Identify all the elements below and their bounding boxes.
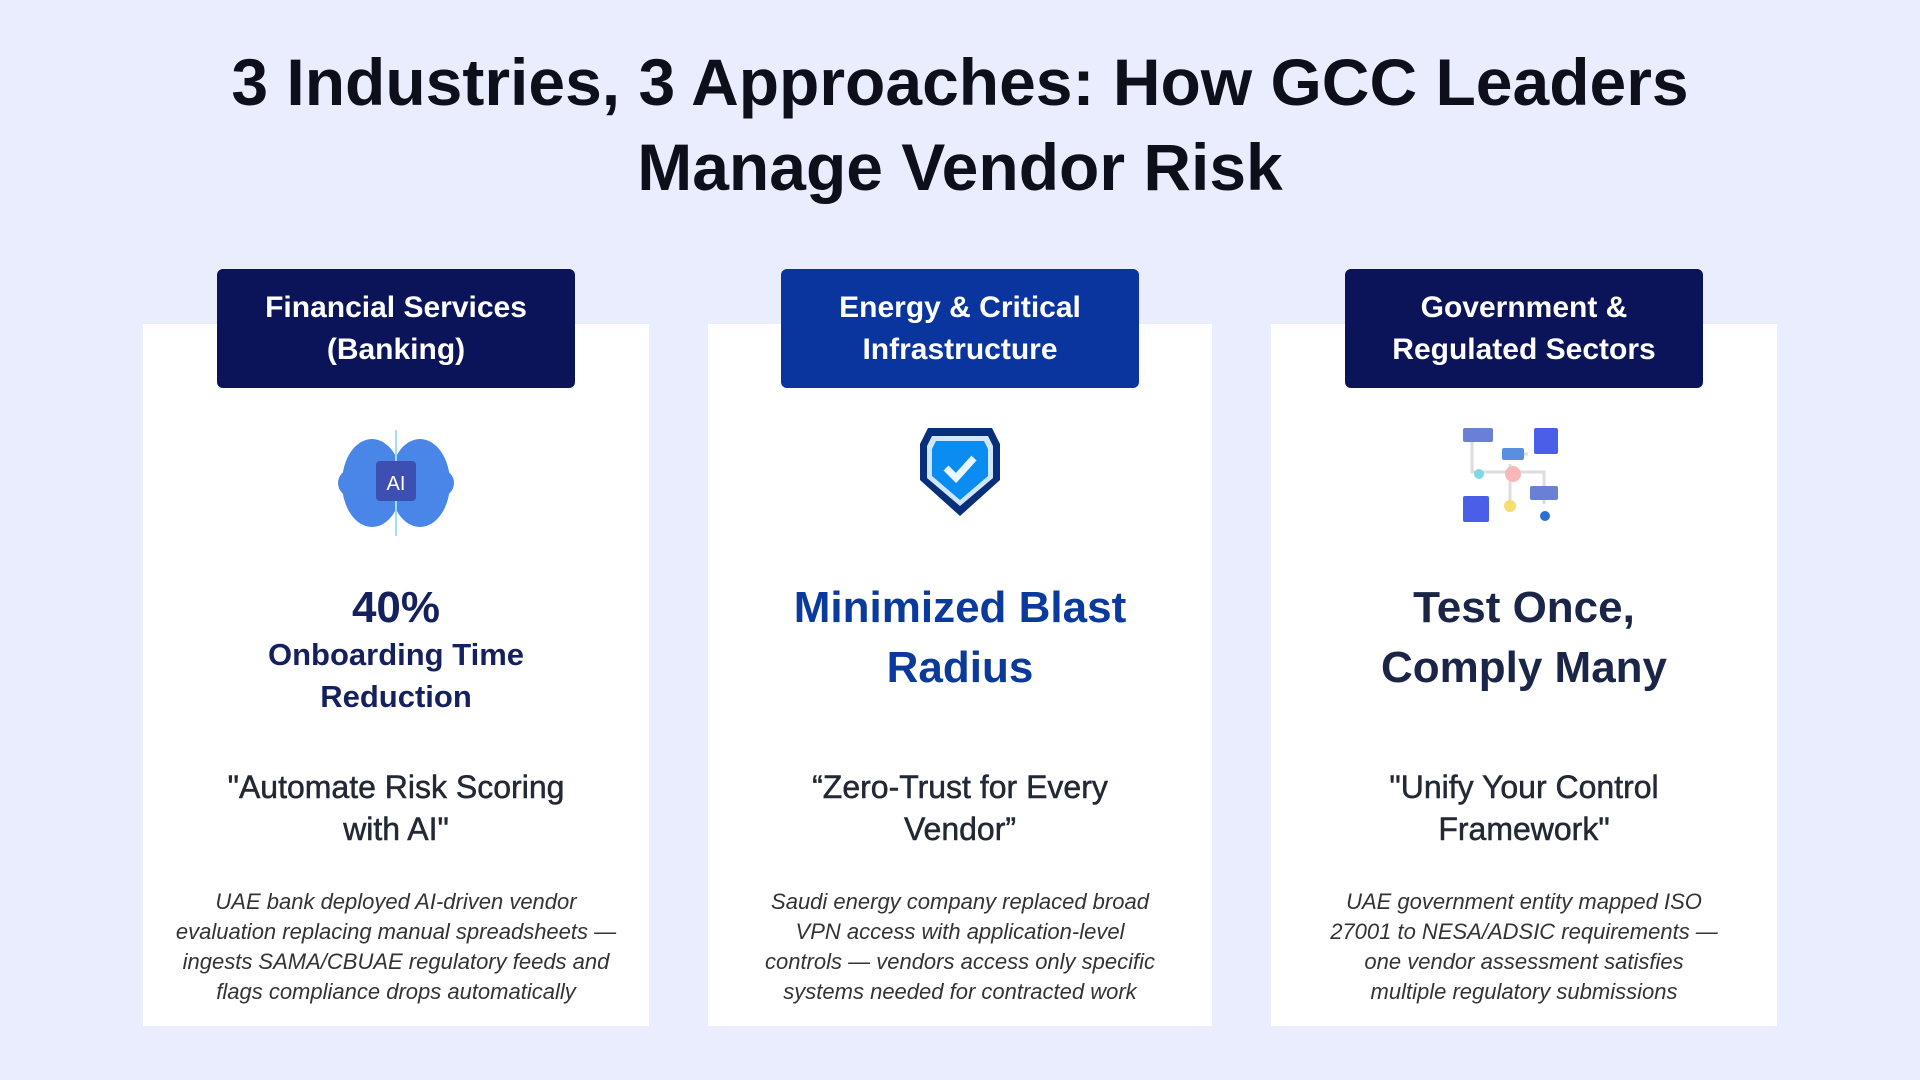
- description: UAE government: one vendor assessment satisfies: [1364, 949, 1684, 974]
- title: Manage Vendor Risk: [637, 130, 1283, 204]
- tab: financial services: (Banking): [327, 332, 465, 366]
- headline: minimized blast radius: Minimized Blast: [794, 583, 1126, 632]
- quote: zero trust: Vendor”: [904, 811, 1016, 847]
- description: UAE government: [1330, 889, 1718, 1004]
- quote: automate: "Automate Risk Scoring: [228, 769, 564, 805]
- panel: energy: [708, 324, 1212, 1026]
- title: 3 Industries, 3 Approaches: How GCC Leaders: [231, 45, 1689, 119]
- icon: AI brain: [338, 430, 454, 536]
- headline: test once: Comply Many: [1381, 643, 1667, 692]
- quote: zero trust: “Zero-Trust for Every: [812, 769, 1108, 805]
- description: Saudi energy: systems needed for contracted work: [783, 979, 1137, 1004]
- icon: AI brain: AI: [387, 473, 405, 495]
- description: Saudi energy: VPN access with application-level: [796, 919, 1124, 944]
- description: Saudi energy: controls — vendors access only specific: [765, 949, 1155, 974]
- stat: 40%: 40%: [352, 583, 440, 632]
- description: UAE government: multiple regulatory submissions: [1371, 979, 1677, 1004]
- headline: test once: Test Once,: [1413, 583, 1635, 632]
- description: UAE bank: evaluation replacing manual spreadsheets —: [176, 919, 616, 944]
- tab: government: Government &: [1421, 290, 1627, 324]
- stat: 40%: Reduction: [320, 679, 472, 714]
- headline: minimized blast radius: [794, 583, 1126, 692]
- quote: automate: with AI": [343, 811, 449, 847]
- icon: flowchart: [1463, 428, 1558, 522]
- tab: government: [1345, 269, 1703, 388]
- description: Saudi energy: Saudi energy company replaced broad: [771, 889, 1149, 914]
- quote: automate: [228, 769, 564, 847]
- panel: government: [1271, 324, 1777, 1026]
- tab: energy: Energy & Critical: [839, 290, 1081, 324]
- quote: unify: "Unify Your Control: [1389, 769, 1659, 805]
- tab: financial services: Financial Services: [265, 290, 527, 324]
- quote: zero trust: [812, 769, 1108, 847]
- tab: government: Regulated Sectors: [1392, 332, 1656, 366]
- title: [231, 45, 1689, 204]
- description: UAE government: 27001 to NESA/ADSIC requirements —: [1330, 919, 1718, 944]
- quote: unify: [1389, 769, 1659, 847]
- panel: financial services: [143, 324, 649, 1026]
- headline: minimized blast radius: Radius: [887, 643, 1033, 692]
- description: UAE government: UAE government entity mapped ISO: [1346, 889, 1702, 914]
- tab: energy: [781, 269, 1139, 388]
- tab: financial services: [217, 269, 575, 388]
- description: UAE bank: [176, 889, 616, 1004]
- description: UAE bank: ingests SAMA/CBUAE regulatory feeds and: [183, 949, 609, 974]
- stat: 40%: [268, 583, 524, 714]
- stat: 40%: Onboarding Time: [268, 637, 524, 672]
- description: UAE bank: flags compliance drops automatically: [216, 979, 576, 1004]
- description: UAE bank: UAE bank deployed AI-driven vendor: [215, 889, 577, 914]
- description: Saudi energy: [765, 889, 1155, 1004]
- tab: energy: Infrastructure: [862, 332, 1058, 366]
- headline: test once: [1381, 583, 1667, 692]
- quote: unify: Framework": [1438, 811, 1610, 847]
- icon: shield: [920, 428, 1000, 516]
